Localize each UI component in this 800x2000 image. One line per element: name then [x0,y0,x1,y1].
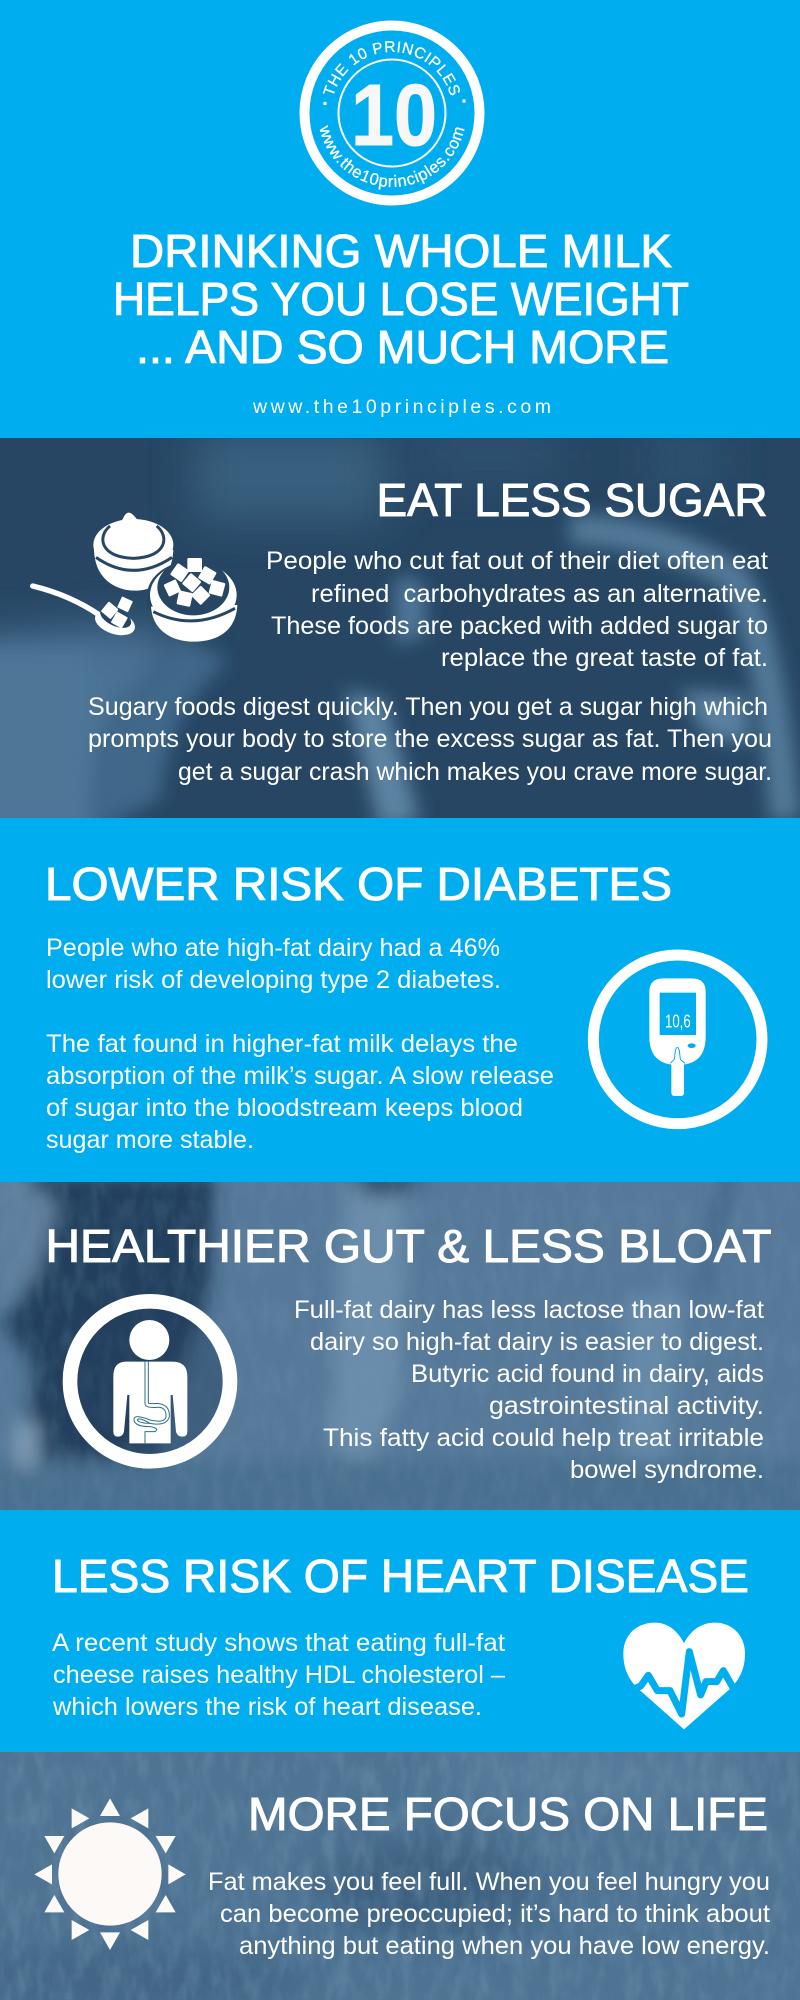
logo badge: www.the10principles.com [320,125,464,190]
logo badge: THE 10 PRINCIPLES [322,41,460,96]
panel: more focus on life [0,1745,800,2000]
background photo: cow legs in grass [0,1170,800,1520]
panel: eat less sugar [0,430,800,840]
body text: which lowers the risk of heart disease. [52,1693,482,1721]
icon: glucose meter: 10,6 [665,1011,691,1032]
body text: get a sugar crash which makes you crave more sugar. [178,758,772,786]
body text [294,1296,764,1484]
icon: glucose meter [593,955,762,1124]
title: DRINKING WHOLE MILK [130,225,672,277]
icon: sugar bowls and spoon [33,513,240,642]
body text: anything but eating when you have low energy. [239,1932,770,1960]
body text: can become preoccupied; it’s hard to think about [220,1900,770,1928]
panel: header [113,20,689,418]
icon: human digestive system [70,1301,230,1461]
body text: absorption of the milk’s sugar. A slow release [46,1062,554,1090]
heading: LESS RISK OF HEART DISEASE [52,1550,749,1602]
heading: HEALTHIER GUT & LESS BLOAT [46,1220,772,1272]
logo badge [300,20,484,206]
panel: less risk of heart disease [0,1510,800,1752]
logo badge: 10 [351,67,437,164]
body text: A recent study shows that eating full-fat [52,1629,505,1657]
body text: The fat found in higher-fat milk delays the [46,1030,518,1058]
body text: This fatty acid could help treat irritable [323,1424,764,1452]
title: HELPS YOU LOSE WEIGHT [113,273,689,325]
background photo: cow [0,430,800,840]
body text: dairy so high-fat dairy is easier to digest. [310,1328,764,1356]
title: ... AND SO MUCH MORE [136,321,669,373]
body text [52,1629,505,1721]
body text: bowel syndrome. [570,1456,764,1484]
body text: of sugar into the bloodstream keeps blood [46,1094,523,1122]
icon: heart with pulse [623,1623,745,1729]
body text: Sugary foods digest quickly. Then you get a sugar high which [88,693,768,721]
icon: sun [34,1798,186,1950]
body text: Full-fat dairy has less lactose than low-fat [294,1296,764,1324]
website url: www.the10principles.com [252,396,551,418]
body text: prompts your body to store the excess sugar as fat. Then you [88,725,772,753]
body text: People who ate high-fat dairy had a 46% [46,934,500,962]
body text: gastrointestinal activity. [489,1392,764,1420]
body text: replace the great taste of fat. [441,644,768,672]
panel: lower risk of diabetes [0,818,800,1182]
body text [88,547,772,786]
body text: Butyric acid found in dairy, aids [411,1360,764,1388]
title [113,225,689,373]
body text: sugar more stable. [46,1126,254,1154]
body text: People who cut fat out of their diet often eat [266,547,768,575]
body text [208,1868,770,1960]
body text: lower risk of developing type 2 diabetes. [46,966,501,994]
body text: refined carbohydrates as an alternative. [311,580,768,608]
body text: cheese raises healthy HDL cholesterol – [53,1661,505,1689]
heading: MORE FOCUS ON LIFE [248,1788,768,1840]
heading: EAT LESS SUGAR [376,474,768,526]
body text: These foods are packed with added sugar to [271,612,768,640]
background photo: grass [0,1745,800,2000]
body text: Fat makes you feel full. When you feel hungry you [208,1868,770,1896]
body text [46,934,554,1154]
panel: healthier gut and less bloat [0,1170,800,1520]
heading: LOWER RISK OF DIABETES [45,858,672,910]
